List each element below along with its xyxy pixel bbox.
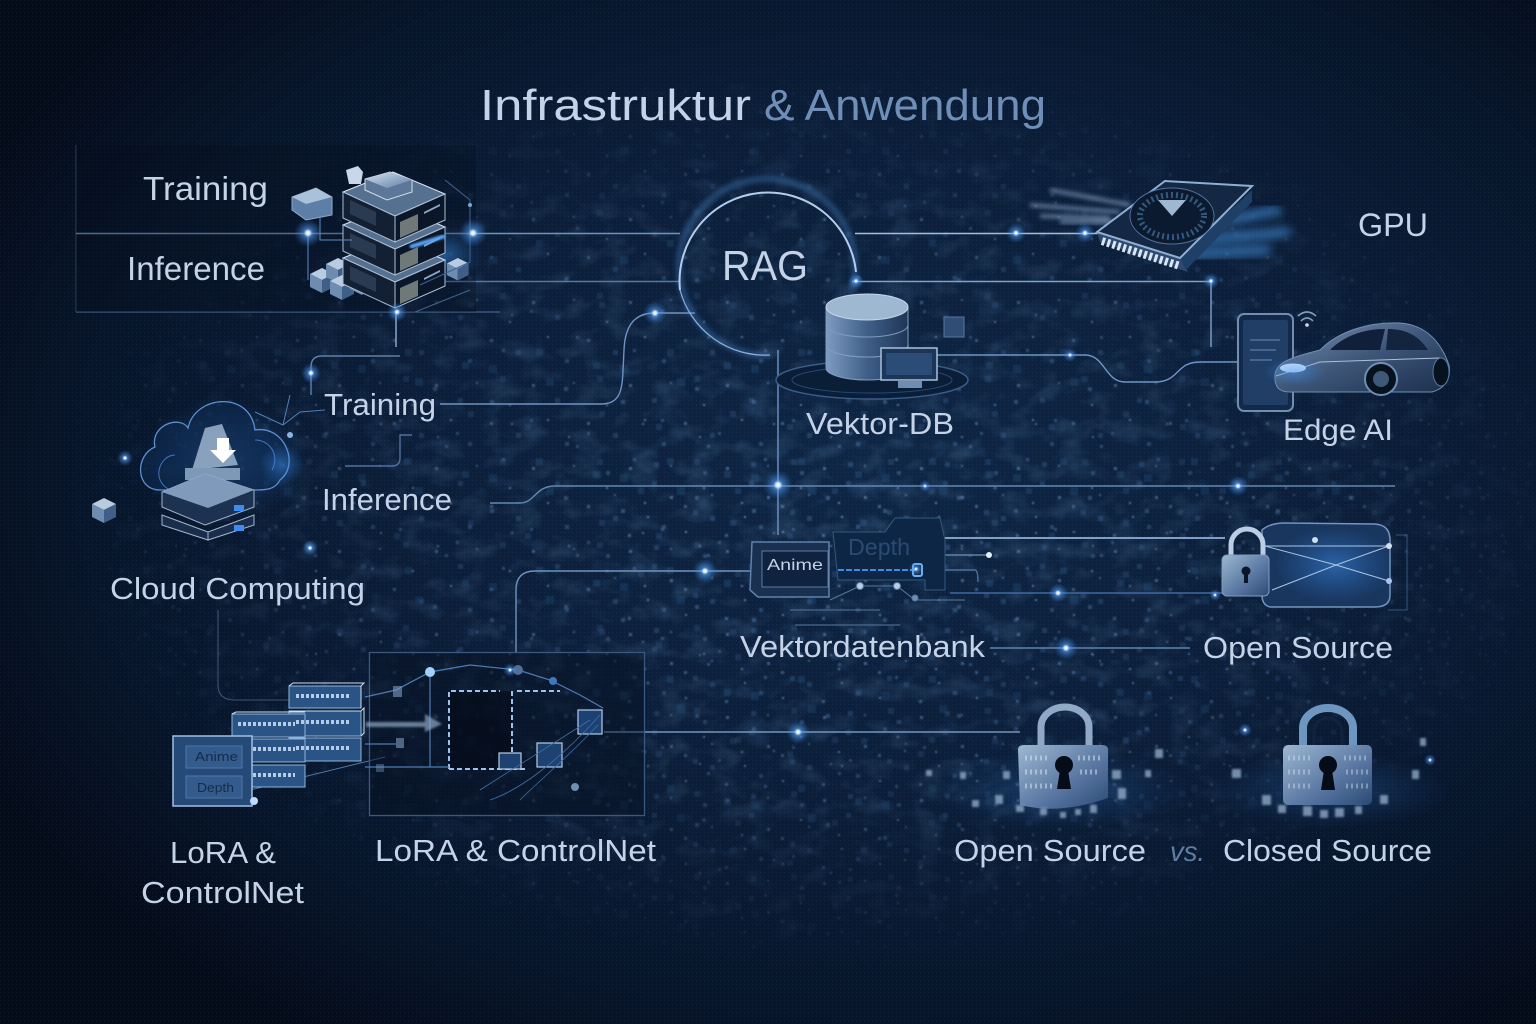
icon: server stack [292, 166, 483, 312]
panel: Open Source network lock [1203, 523, 1407, 665]
icon: car [1263, 312, 1449, 395]
panel: cloud computing [92, 387, 452, 606]
connector lines [76, 145, 1395, 732]
label: Inference: Inference [322, 482, 452, 517]
icon: Depth card: Depth [848, 534, 910, 560]
icon: Anime card [750, 542, 829, 597]
panel: Vektordatenbank cards [740, 518, 992, 664]
panel: GPU [1030, 181, 1428, 272]
icon: model block stacks: Depth [197, 780, 234, 795]
glow nodes [117, 219, 1436, 766]
arrow [366, 714, 442, 732]
label: Open Source: Open Source [1203, 630, 1393, 665]
label: GPU: GPU [1358, 207, 1428, 243]
network nodes [790, 552, 992, 625]
icon: closed lock [1210, 708, 1450, 828]
panel: Edge AI [1238, 312, 1449, 447]
label: LoRA & ControlNet: LoRA & ControlNet [375, 833, 656, 868]
icon: Depth card [833, 518, 945, 590]
label: Vektordatenbank: Vektordatenbank [740, 629, 986, 664]
icon: Anime card: Anime [767, 557, 823, 574]
label: Edge AI: Edge AI [1283, 414, 1393, 447]
panel: LoRA and ControlNet stack [141, 683, 385, 910]
icon: network panel [1262, 523, 1407, 610]
label: Inference: Inference [127, 250, 265, 287]
icon: model block stacks: Anime [195, 749, 238, 764]
panel: ControlNet diagram [365, 652, 656, 868]
icon: phone [1238, 314, 1293, 411]
title [480, 81, 1046, 130]
label: LoRA & ControlNet: ControlNet [141, 875, 304, 910]
label: LoRA & ControlNet: LoRA & [170, 835, 276, 870]
label: Training: Training [143, 170, 268, 207]
small boxes [499, 710, 602, 769]
icon: database cylinders [776, 294, 968, 399]
label: LoRA & ControlNet [141, 835, 304, 910]
label: Cloud Computing: Cloud Computing [110, 571, 365, 606]
icon: cloud with server [92, 395, 325, 540]
title: Infrastruktur [480, 81, 751, 130]
icon: padlock [1222, 529, 1269, 596]
label: vs.: vs. [1170, 836, 1205, 867]
icon: open lock [926, 707, 1190, 830]
graph path [365, 665, 603, 767]
label: Training: Training [324, 387, 436, 422]
panel: Vektor-DB [776, 294, 968, 441]
RAG circle [679, 179, 856, 355]
label: Vektor-DB: Vektor-DB [806, 406, 954, 441]
icon: GPU chip [1030, 181, 1290, 272]
panel: training and inference server [76, 145, 483, 312]
panel: open versus closed source [926, 707, 1450, 868]
dashed control frame [449, 691, 560, 769]
label: Closed Source: Closed Source [1223, 833, 1432, 868]
label: RAG: RAG [722, 242, 808, 289]
label: Open Source: Open Source [954, 833, 1146, 868]
title: & Anwendung [764, 81, 1046, 130]
icon: model block stacks [173, 683, 385, 806]
